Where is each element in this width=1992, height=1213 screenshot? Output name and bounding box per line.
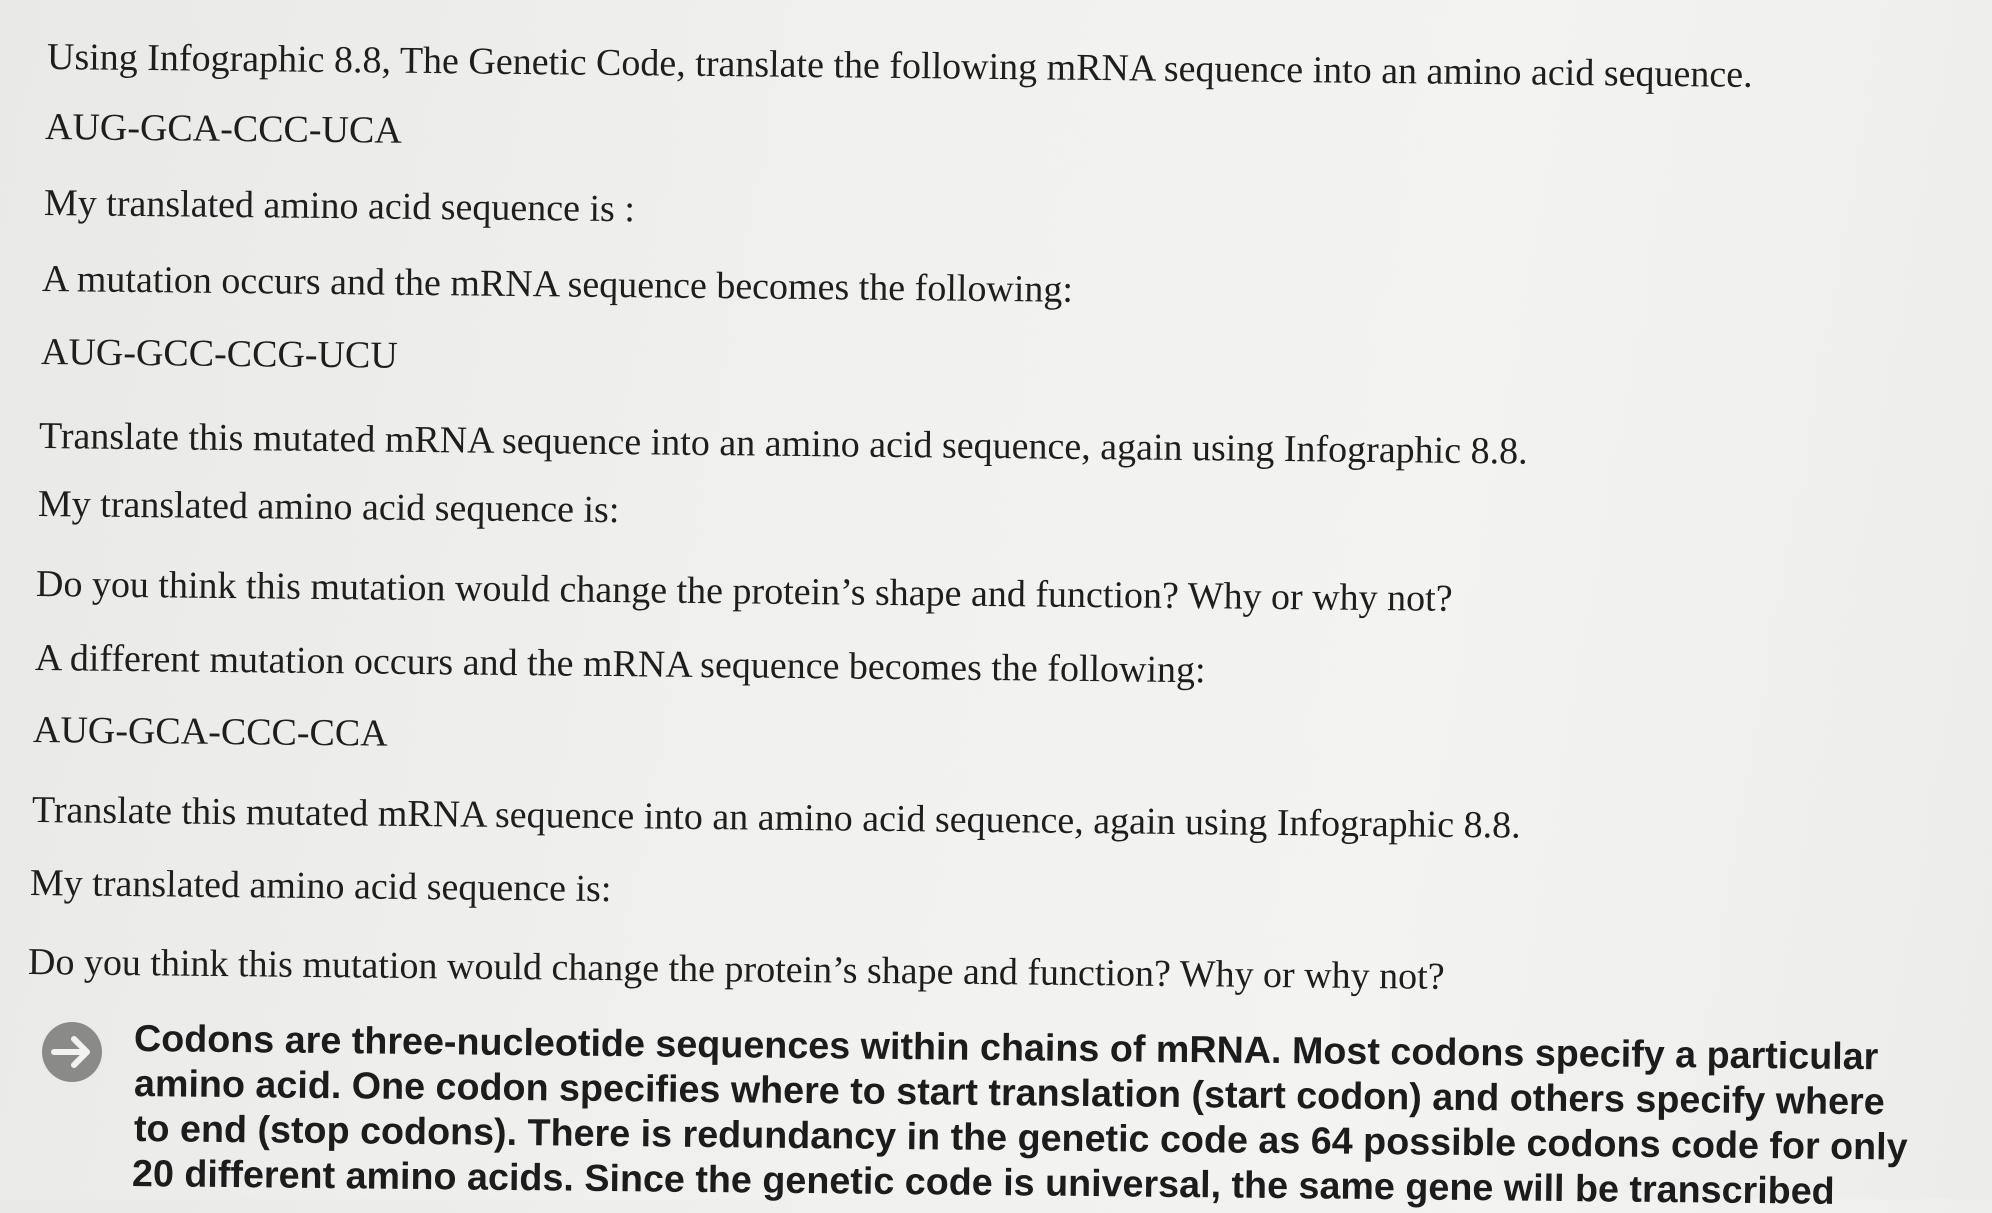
- codon explanation paragraph: [132, 1017, 1908, 1212]
- sequence 3: AUG-GCA-CCC-CCA: [33, 709, 388, 755]
- mutation statement 1: A mutation occurs and the mRNA sequence becomes the following:: [42, 258, 1073, 311]
- icon: arrow circle: [42, 1022, 102, 1082]
- codon explanation paragraph: 20 different amino acids. Since the genetic code is universal, the same gene will be transcribed: [132, 1152, 1835, 1212]
- answer prompt 1: My translated amino acid sequence is :: [44, 182, 635, 230]
- codon explanation paragraph: to end (stop codons). There is redundancy in the genetic code as 64 possible codons code for only: [134, 1107, 1908, 1168]
- translate prompt 2: Translate this mutated mRNA sequence into an amino acid sequence, again using Infographic 8.8.: [39, 415, 1528, 473]
- question line 1: Using Infographic 8.8, The Genetic Code, translate the following mRNA sequence into an amino acid sequence.: [47, 36, 1753, 96]
- codon explanation paragraph: Codons are three-nucleotide sequences within chains of mRNA. Most codons specify a particular: [134, 1017, 1879, 1077]
- answer prompt 2: My translated amino acid sequence is:: [38, 483, 620, 531]
- sequence 1: AUG-GCA-CCC-UCA: [45, 106, 402, 152]
- mutation statement 2: A different mutation occurs and the mRNA sequence becomes the following:: [35, 637, 1206, 691]
- sequence 2: AUG-GCC-CCG-UCU: [41, 331, 398, 377]
- question shape 1: Do you think this mutation would change the protein’s shape and function? Why or why not?: [36, 563, 1453, 620]
- translate prompt 3: Translate this mutated mRNA sequence into an amino acid sequence, again using Infographic 8.8.: [32, 789, 1521, 847]
- answer prompt 3: My translated amino acid sequence is:: [30, 862, 612, 910]
- question shape 2: Do you think this mutation would change the protein’s shape and function? Why or why not?: [28, 941, 1445, 998]
- codon explanation paragraph: amino acid. One codon specifies where to start translation (start codon) and others specify where: [134, 1062, 1885, 1122]
